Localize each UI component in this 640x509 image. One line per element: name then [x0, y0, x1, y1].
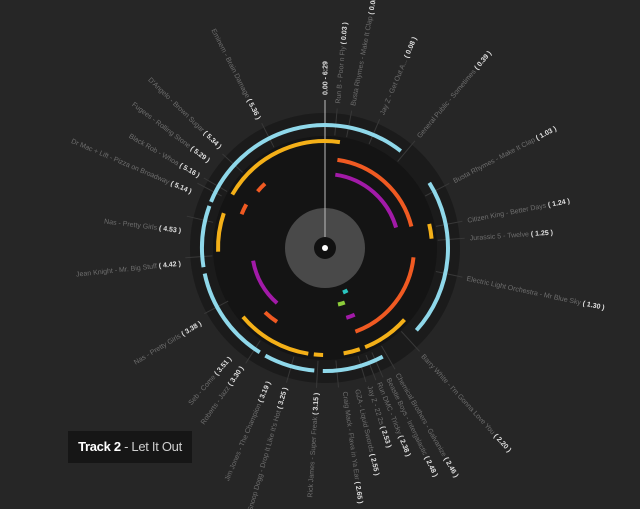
labels: Electric Light Orchestra - Mr Blue Sky ( 1.30 ) — [466, 276, 605, 312]
labels: General Public - Sometimes ( 0.39 ) — [416, 50, 493, 140]
labels: Jay Z - Get Out A... ( 0.08 ) — [379, 36, 419, 116]
labels: Snoop Dogg - Drop It Like It's Hot ( 3.25 ) — [247, 387, 289, 509]
labels: Dr Mac + Lift - Pizza on Broadway ( 5.14 ) — [70, 138, 193, 195]
labels: Busta Rhymes - Make It Clap ( 1.03 ) — [452, 126, 558, 185]
labels: Barry White - I'm Gonna Love You ( 2.20 ) — [419, 353, 512, 454]
arcs: purple track — [253, 175, 396, 318]
arcs: cyan track — [202, 125, 448, 371]
arcs: orange track — [242, 160, 414, 332]
arcs: yellow track — [218, 141, 432, 355]
labels: Citizen King - Better Days ( 1.24 ) — [467, 198, 571, 225]
labels: Black Rob - Whoa ( 5.16 ) — [127, 133, 201, 179]
labels: D'Angelo - Brown Sugar ( 5.34 ) — [146, 77, 222, 151]
labels: Fugees - Rolling Stone ( 5.29 ) — [130, 101, 211, 164]
labels: Jurassic 5 - Twelve ( 1.25 ) — [469, 230, 553, 242]
labels: Rick James - Super Freak ( 3.15 ) — [307, 393, 321, 498]
labels: 0.00 - 6:29 — [322, 61, 330, 95]
labels: Jean Knight - Mr. Big Stuff ( 4.42 ) — [76, 261, 181, 279]
labels: Roberts - Jazz ( 3.30 ) — [200, 365, 246, 426]
labels: Seb - Come ( 3.51 ) — [188, 356, 233, 407]
labels: Beastie Boys - Intergalactic ( 2.48 ) — [385, 377, 439, 478]
centre hole — [314, 237, 336, 259]
title box — [68, 431, 192, 463]
labels: Jay Z - 22 2s ( 2.53 ) — [366, 385, 392, 449]
outer disc — [190, 113, 460, 383]
labels: Nas - Pretty Girls ( 4.53 ) — [104, 218, 181, 235]
inner label disc — [285, 208, 365, 288]
labels: Nas - Pretty Girls ( 3.38 ) — [133, 321, 203, 366]
labels: GZA - Liquid Swords ( 2.55 ) — [353, 389, 380, 476]
labels: Chemical Brothers - Galvanize ( 2.46 ) — [394, 372, 459, 479]
arcs: green and teal — [338, 290, 348, 304]
title box: Track 2 - Let It Out — [78, 439, 182, 454]
labels: Eminem - Brain Damage ( 5.36 ) — [209, 28, 261, 121]
labels: Run B - Poor n Fly ( 0.03 ) — [335, 22, 349, 104]
labels: Craig Mack - Flava in Ya Ear ( 2.65 ) — [341, 391, 363, 504]
labels: Run DMC - Tricky ( 2.38 ) — [375, 382, 411, 458]
labels: Jim Jones - The Champion ( 3.19 ) — [224, 380, 272, 482]
playhead line — [324, 100, 326, 248]
